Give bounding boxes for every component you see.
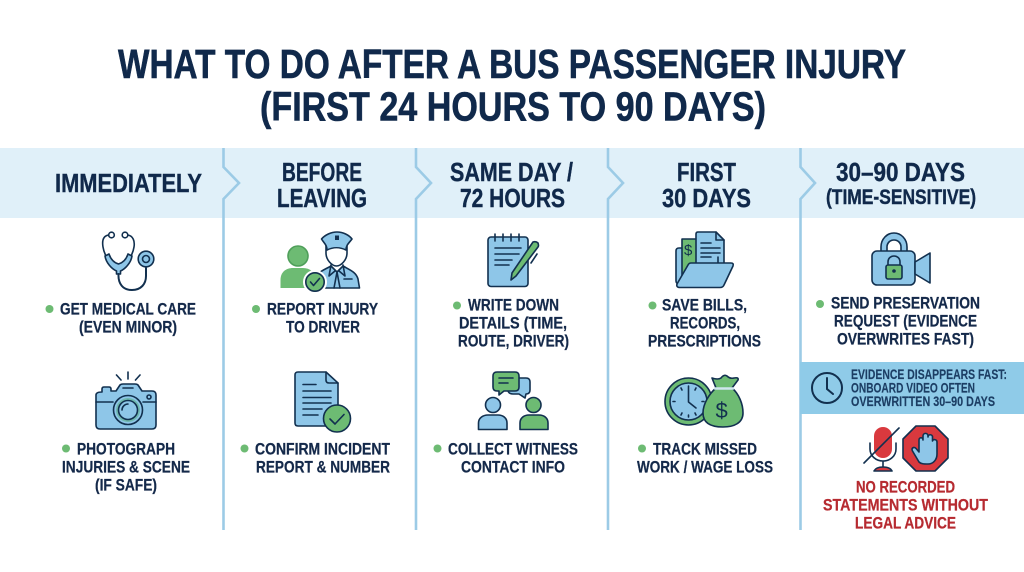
bullet and text: track missed work: TRACK MISSED [653, 440, 757, 458]
bullet and text: get medical care: (EVEN MINOR) [79, 318, 177, 336]
icon: folder with bills: $ [684, 242, 693, 259]
callout: evidence disappears fast [800, 362, 1024, 414]
bullet and text: confirm incident report: CONFIRM INCIDENT [255, 440, 390, 458]
title: (FIRST 24 HOURS TO 90 DAYS) [260, 84, 766, 130]
bullet and text: photograph injuries: INJURIES & SCENE [62, 458, 190, 476]
heading: 30-90 days: 30–90 DAYS [836, 157, 965, 187]
bullet and text: save bills: SAVE BILLS, [662, 296, 747, 314]
warning text: no recorded statements [823, 479, 988, 532]
bullet and text: send preservation request: OVERWRITES FAST) [837, 330, 974, 348]
heading: immediately: IMMEDIATELY [55, 168, 202, 198]
bullet and text: track missed work: WORK / WAGE LOSS [637, 458, 773, 476]
bullet and text: track missed work [637, 440, 773, 476]
bullet and text: write down details: ROUTE, DRIVER) [458, 332, 569, 350]
icon: folder with bills [676, 232, 733, 288]
icon: locked video camera [872, 233, 930, 285]
title [118, 41, 906, 130]
icon: camera [96, 372, 156, 429]
icon: muted microphone [864, 427, 899, 471]
icon: clock [812, 373, 842, 403]
icon: stop hand [903, 426, 948, 471]
icon: witnesses talking [478, 372, 548, 430]
warning text: no recorded statements: STATEMENTS WITHOUT [823, 496, 988, 514]
bullet and text: send preservation request: REQUEST (EVIDENCE [834, 312, 977, 330]
bullet and text: write down details [453, 296, 569, 350]
bullet and text: photograph injuries [62, 440, 190, 494]
bullet and text: report injury: TO DRIVER [286, 318, 360, 336]
heading: 30-90 days [826, 157, 976, 209]
column dividers with chevrons [224, 148, 815, 530]
bullet and text: get medical care: GET MEDICAL CARE [60, 300, 196, 318]
bullet and text: write down details: DETAILS (TIME, [459, 314, 567, 332]
bullet and text: save bills: PRESCRIPTIONS [648, 332, 761, 350]
icon: stethoscope [103, 232, 154, 290]
timeline header band [0, 148, 1024, 218]
panel: same day / 72 hours [434, 157, 578, 476]
bullet and text: confirm incident report: REPORT & NUMBER [256, 458, 390, 476]
bullet and text: photograph injuries: PHOTOGRAPH [77, 440, 175, 458]
bullet and text: send preservation request: SEND PRESERVATION [831, 294, 980, 312]
icon: passenger and officer [280, 232, 360, 294]
callout text: ONBOARD VIDEO OFTEN [851, 380, 975, 396]
panel: 30-90 days time-sensitive [800, 157, 1024, 532]
heading: before leaving: BEFORE [282, 157, 362, 187]
bullet and text: send preservation request [816, 294, 980, 348]
callout text [851, 367, 1007, 409]
bullet and text: write down details: WRITE DOWN [468, 296, 559, 314]
panel: before leaving [240, 157, 390, 476]
heading: same day / 72 hours: SAME DAY / [450, 157, 573, 187]
icon: clock and money bag: $ [716, 398, 728, 423]
bullet and text: save bills [648, 296, 761, 350]
heading: first 30 days: 30 DAYS [662, 183, 751, 213]
bullet and text: report injury [252, 300, 378, 336]
warning text: no recorded statements: NO RECORDED [856, 479, 955, 497]
bullet and text: report injury: REPORT INJURY [267, 300, 378, 318]
panel: immediately [46, 168, 202, 494]
bullet and text: save bills: RECORDS, [670, 314, 740, 332]
heading: before leaving [277, 157, 367, 213]
heading: same day / 72 hours [450, 157, 573, 213]
panel: first 30 days [637, 157, 773, 476]
icon: notepad and pen [488, 234, 538, 286]
bullet and text: get medical care [46, 300, 196, 336]
icon: incident report document [295, 372, 350, 432]
bullet and text: photograph injuries: (IF SAFE) [95, 476, 157, 494]
heading: 30-90 days: (TIME-SENSITIVE) [826, 186, 976, 209]
bullet and text: collect witness contact info: COLLECT WITNESS [448, 440, 578, 458]
heading: first 30 days [662, 157, 751, 213]
bullet and text: collect witness contact info [434, 440, 578, 476]
heading: before leaving: LEAVING [277, 183, 367, 213]
heading: same day / 72 hours: 72 HOURS [460, 183, 565, 213]
bullet and text: collect witness contact info: CONTACT INFO [461, 458, 565, 476]
bullet and text: confirm incident report [240, 440, 390, 476]
heading: first 30 days: FIRST [677, 157, 736, 187]
warning text: no recorded statements: LEGAL ADVICE [855, 514, 956, 532]
icon: clock and money bag [665, 375, 743, 427]
